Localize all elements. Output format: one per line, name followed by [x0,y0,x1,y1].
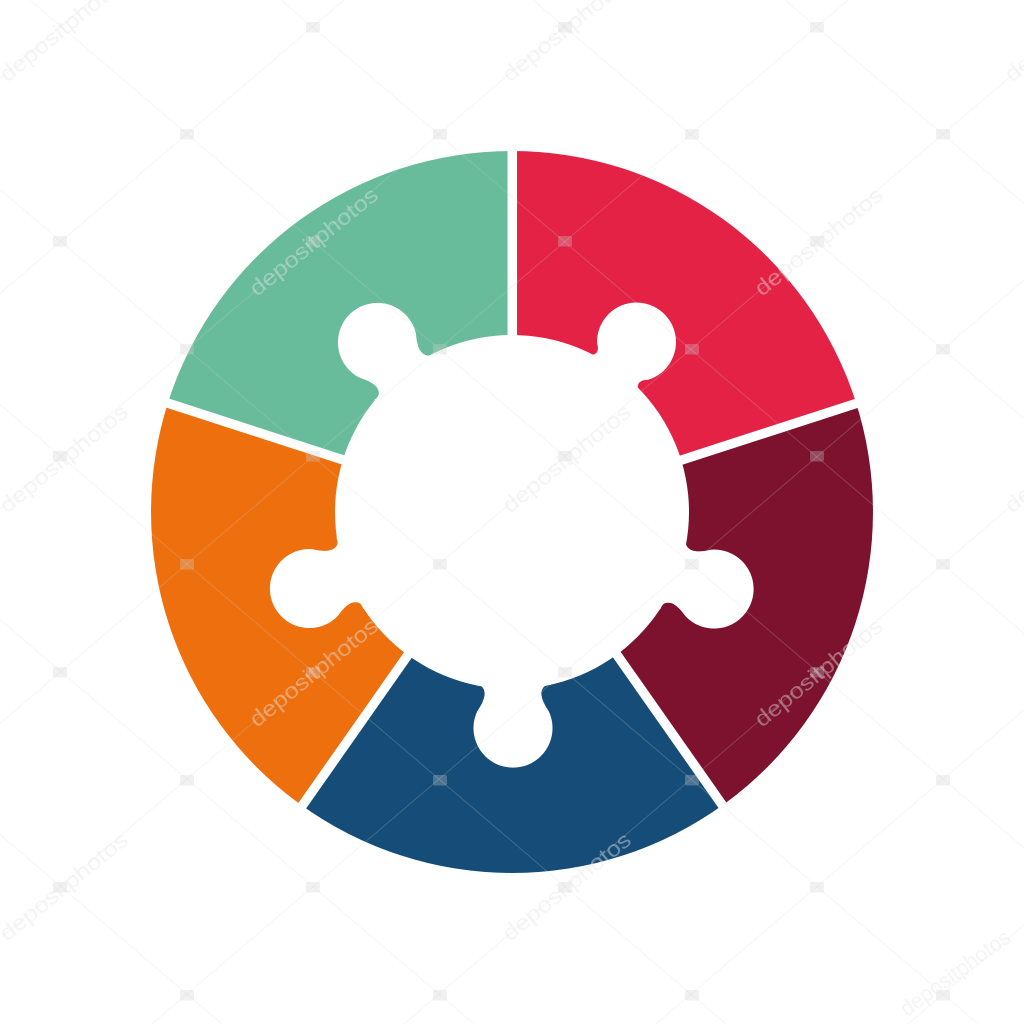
watermark: depositphotos text: depositphotos [244,182,383,301]
watermark: depositphotos text: depositphotos [895,924,1015,1021]
watermark: depositphotos text: depositphotos [749,613,888,732]
segment: navy blue [300,512,724,873]
segment: red [512,151,855,512]
central white hub with puzzle knobs [258,287,765,768]
segment: orange [151,400,512,804]
watermark: depositphotos text: depositphotos [497,399,636,518]
watermark: depositphotos text: depositphotos [497,827,636,946]
watermark: depositphotos text: depositphotos [749,182,888,301]
watermark: depositphotos text: depositphotos [244,613,383,732]
segment: maroon [512,400,873,804]
segment: green [169,151,512,512]
white gaps between segments [155,145,870,816]
